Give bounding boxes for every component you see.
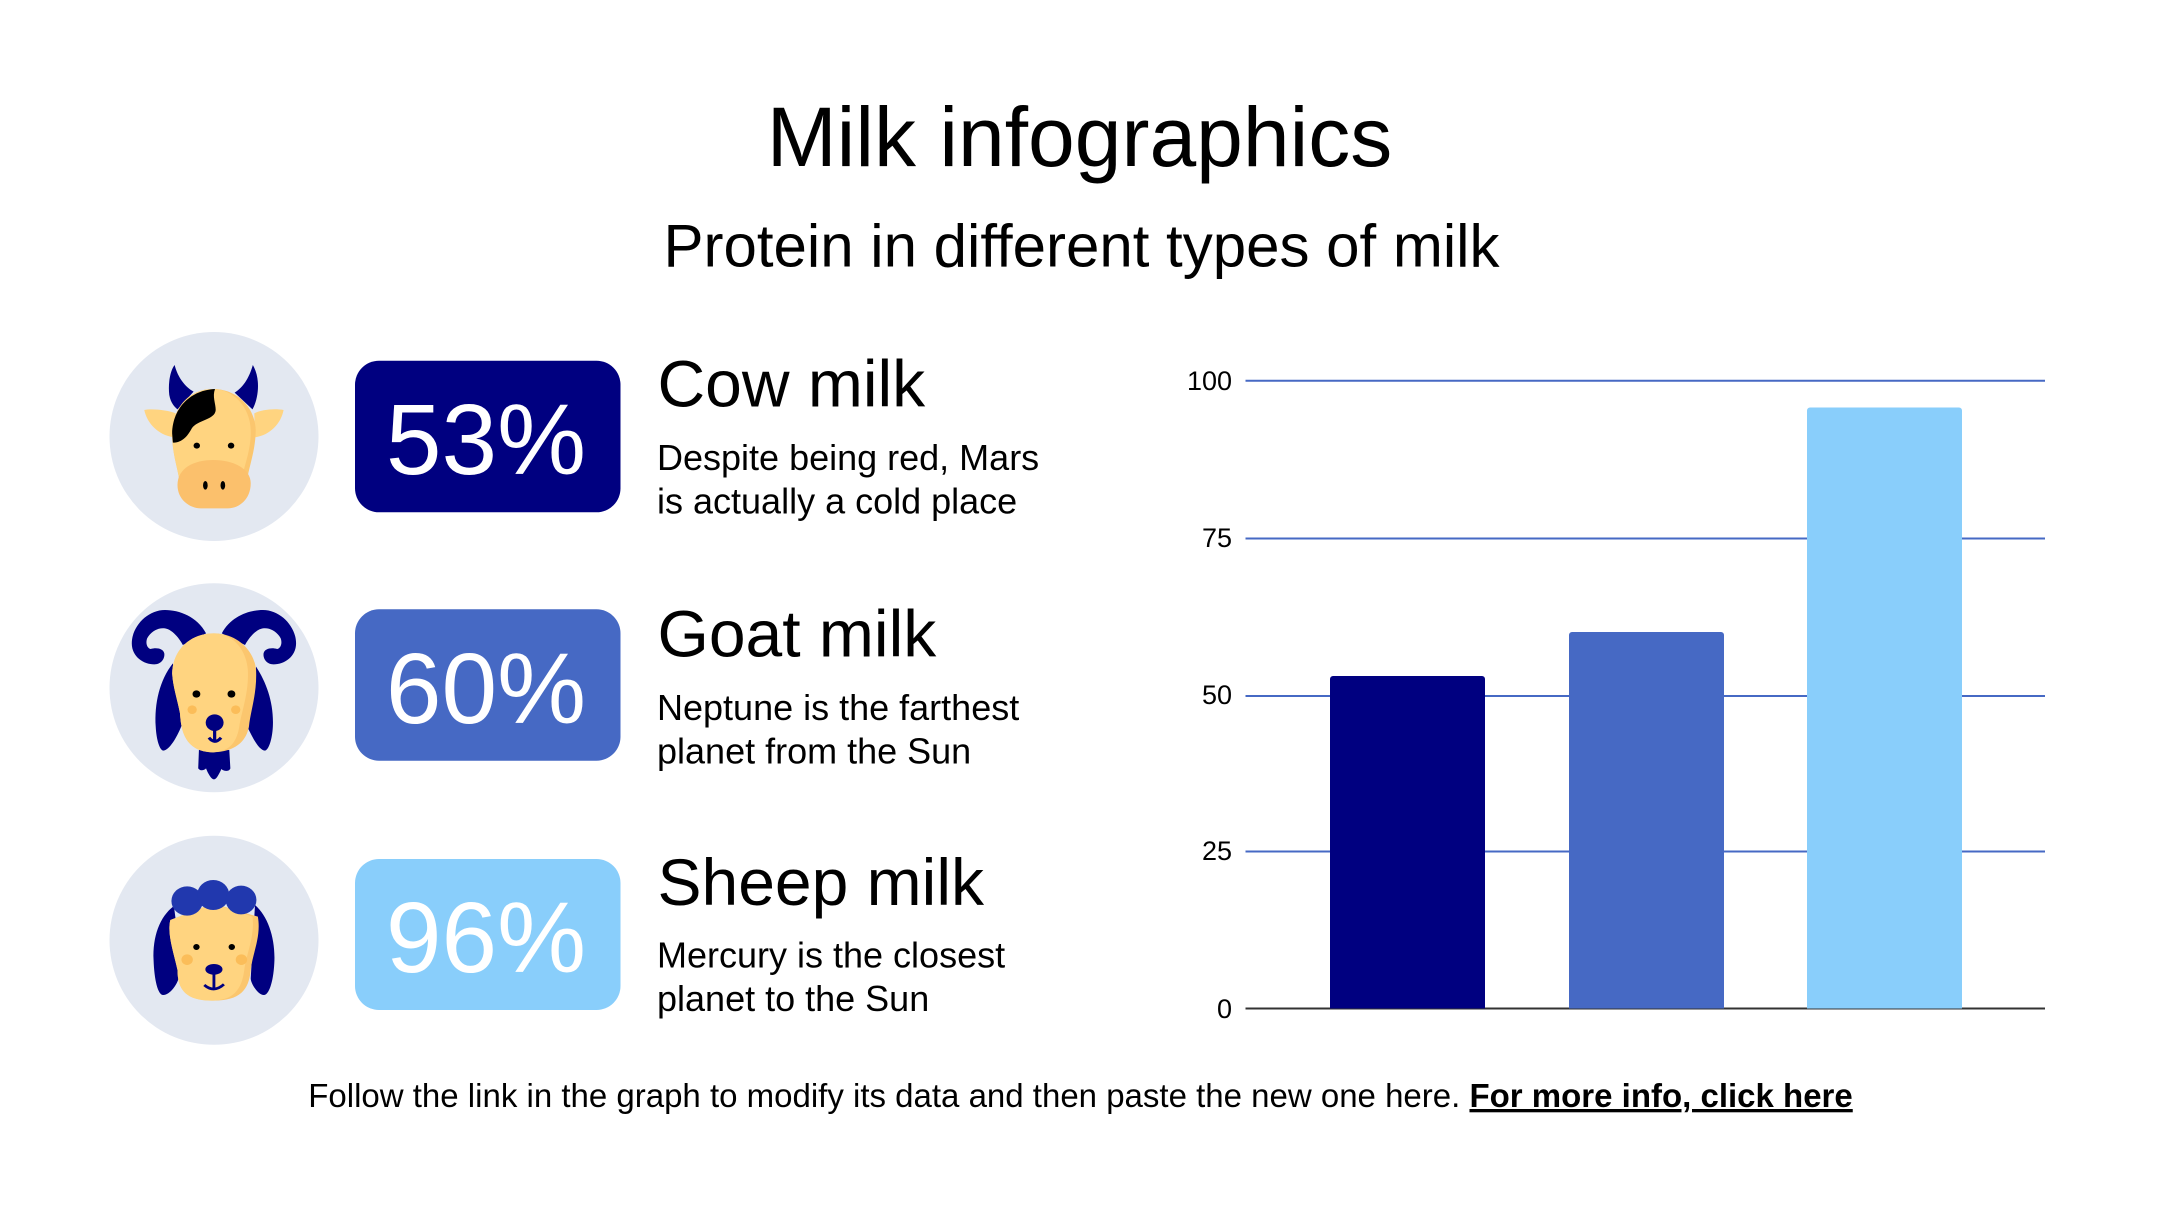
- percentage badge: 53%: [355, 361, 620, 512]
- percentage badge: 53%: 53%: [386, 384, 586, 496]
- description: sheep milk: planet to the Sun: [657, 978, 929, 1019]
- subtitle: Protein in different types of milk: [664, 212, 1500, 280]
- heading: sheep milk: Sheep milk: [658, 845, 985, 919]
- bar: sheep 96: [1807, 408, 1962, 1008]
- description: sheep milk: Mercury is the closest: [657, 934, 1005, 976]
- description: cow milk: is actually a cold place: [657, 480, 1017, 522]
- icon: cow: [110, 332, 318, 541]
- y-axis labels: 75: [1202, 523, 1232, 553]
- heading: cow milk: Cow milk: [658, 346, 926, 420]
- panel: goat milk: [110, 583, 1019, 792]
- y-axis labels: [1187, 366, 1232, 1024]
- percentage badge: 60%: [355, 609, 620, 761]
- percentage badge: 60%: 60%: [386, 633, 586, 745]
- percentage badge: 96%: [355, 859, 620, 1010]
- footer note: Follow the link in the graph to modify its data and then paste the new one here. For more info, click here: [308, 1077, 1853, 1114]
- panel: sheep milk: [110, 836, 1005, 1045]
- bar chart: [1187, 366, 2045, 1024]
- bar: goat 60: [1569, 632, 1724, 1008]
- icon: goat: [110, 583, 318, 792]
- y-axis labels: 0: [1217, 994, 1232, 1024]
- heading: goat milk: Goat milk: [658, 596, 937, 670]
- bar: cow 53: [1330, 676, 1485, 1008]
- y-axis labels: 25: [1202, 836, 1232, 866]
- description: goat milk: Neptune is the farthest: [657, 687, 1019, 728]
- panel: cow milk: [110, 332, 1039, 541]
- description: goat milk: planet from the Sun: [657, 730, 971, 772]
- y-axis labels: 100: [1187, 366, 1232, 396]
- y-axis labels: 50: [1202, 680, 1232, 710]
- percentage badge: 96%: 96%: [386, 882, 586, 994]
- title: Milk infographics: [767, 90, 1392, 184]
- description: cow milk: Despite being red, Mars: [657, 437, 1039, 478]
- icon: sheep: [110, 836, 318, 1045]
